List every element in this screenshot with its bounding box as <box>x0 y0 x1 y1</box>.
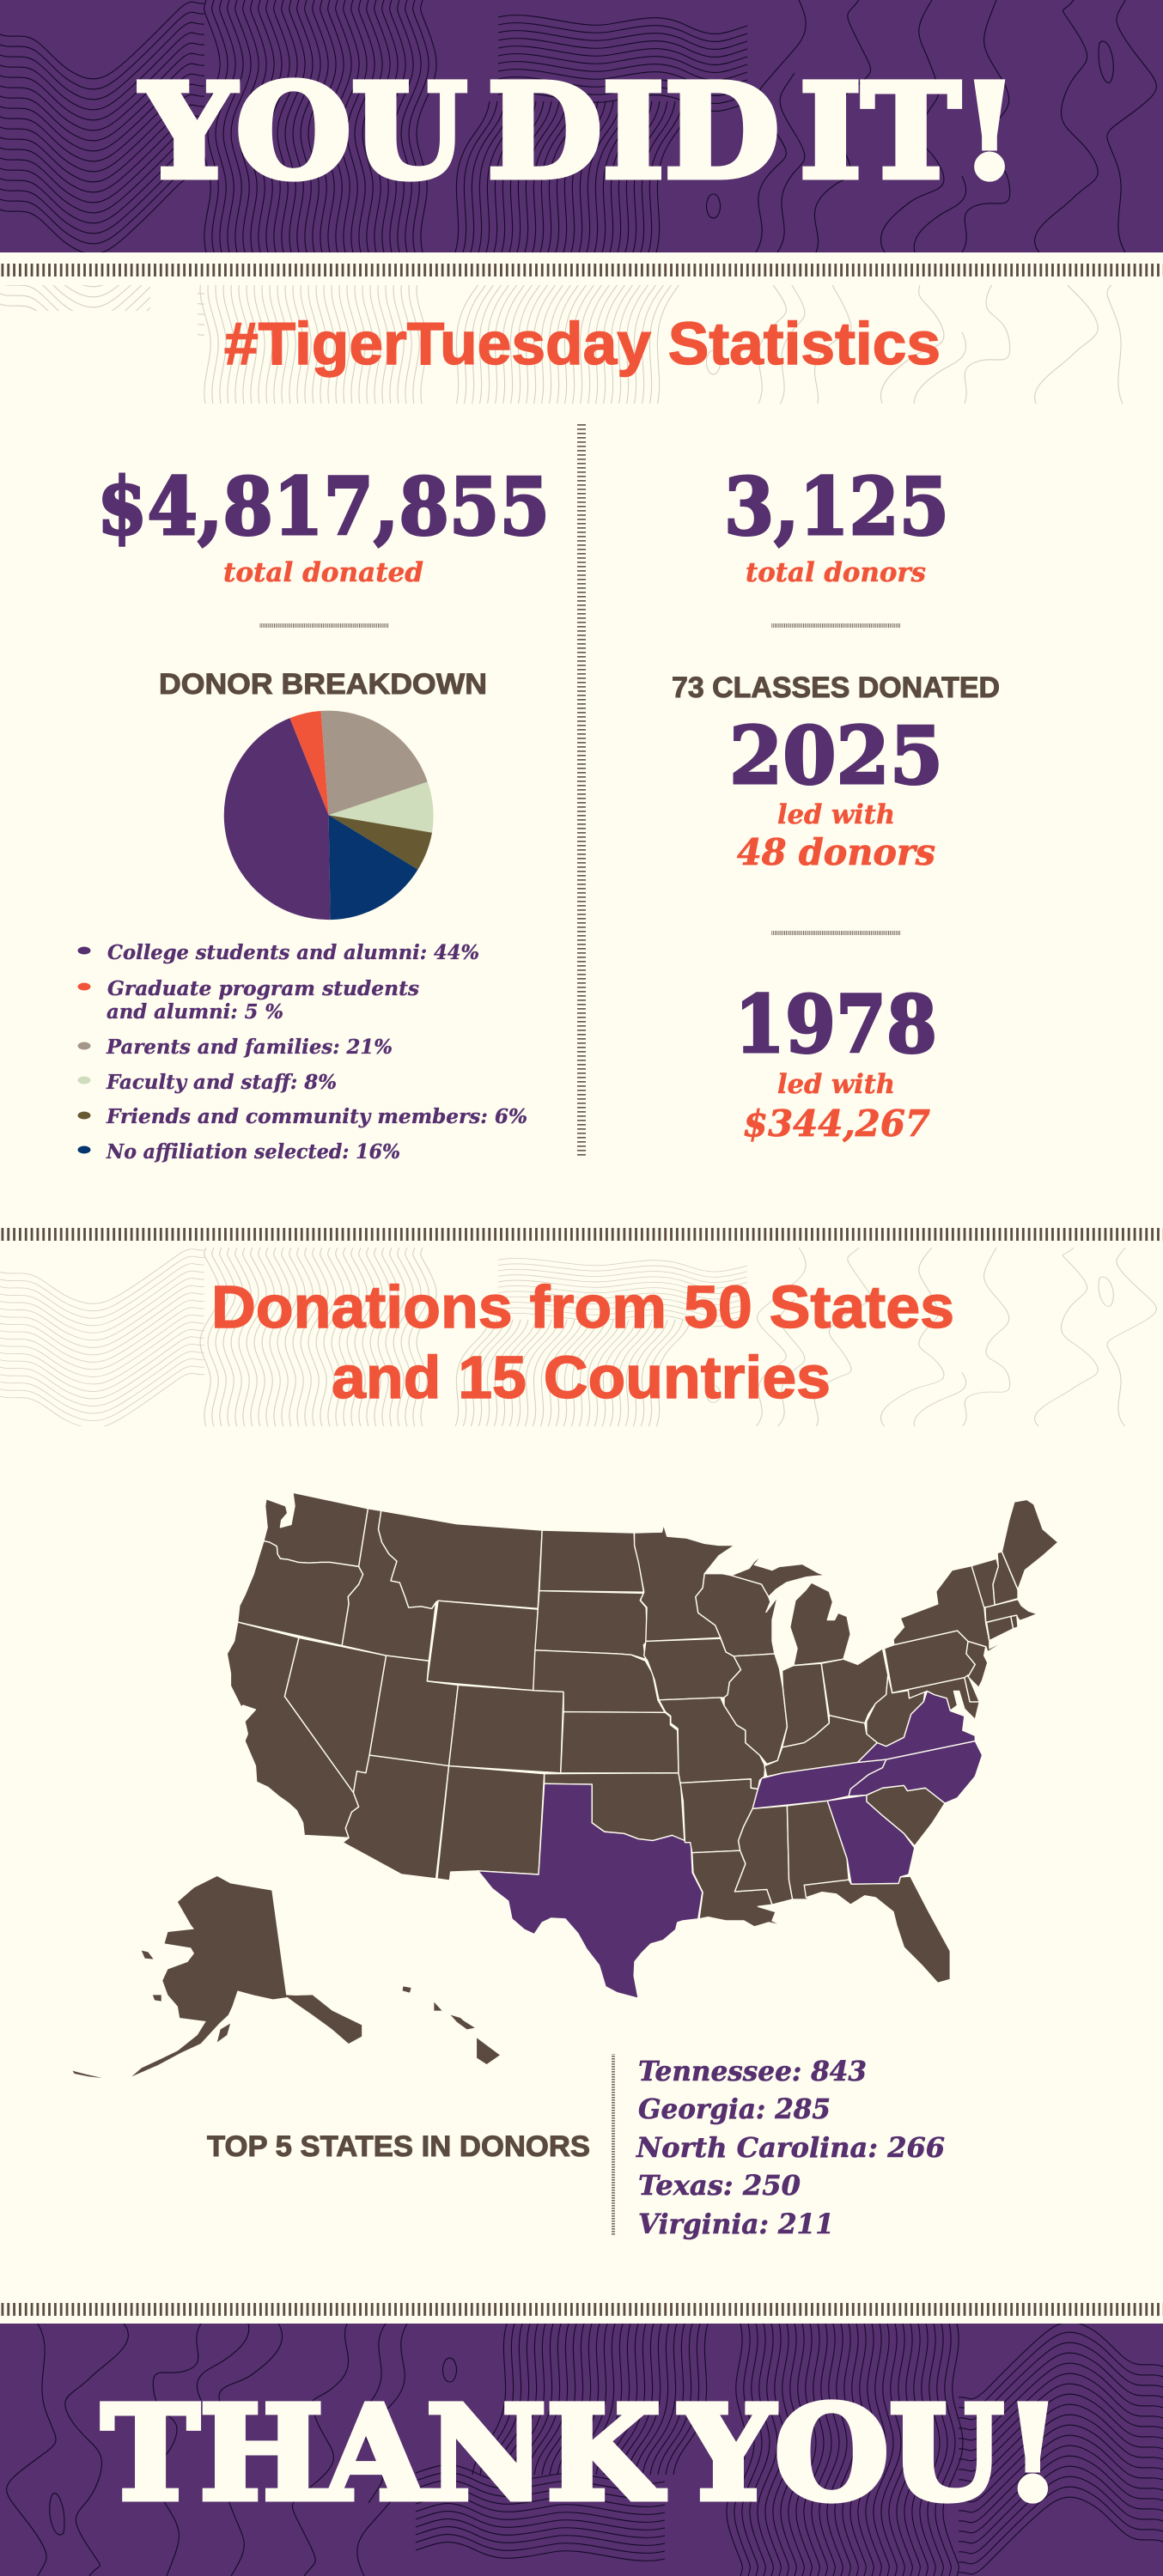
list: top 5 states in donors: Georgia: 285 <box>638 2093 831 2125</box>
stat: class of 2025: 2025 <box>729 709 943 802</box>
heading: classes donated: 73 CLASSES DONATED <box>672 671 1000 704</box>
highlighted state: Texas <box>478 1783 703 1998</box>
map: Alaska <box>72 1876 362 2078</box>
panel: total donated and donor breakdown <box>77 460 550 1163</box>
highlighted state: Tennessee <box>752 1759 886 1808</box>
map: western states <box>227 1492 703 1998</box>
stat label: led with: led with <box>777 799 895 830</box>
pie chart: donor breakdown <box>224 711 434 920</box>
title: thank you: THANK YOU! <box>101 2377 1062 2530</box>
list: top 5 states in donors: North Carolina: 266 <box>636 2131 945 2164</box>
list: top 5 states in donors: Virginia: 211 <box>638 2208 834 2240</box>
stat label: led with: led with <box>777 1069 895 1100</box>
legend: donor categories: Parents and families: 21% <box>106 1036 393 1059</box>
heading: TigerTuesday statistics: #TigerTuesday Statistics <box>224 310 941 377</box>
legend: donor categories: Faculty and staff: 8% <box>106 1071 337 1094</box>
title: you did it: YOU DID IT! <box>139 55 1019 208</box>
list: top 5 states in donors: Tennessee: 843 <box>638 2055 867 2087</box>
panel: bottom banner <box>0 2322 1163 2576</box>
list: top 5 states in donors <box>636 2055 945 2240</box>
highlighted state: Virginia <box>858 1691 975 1762</box>
list: top 5 states in donors: Texas: 250 <box>638 2169 801 2202</box>
panel: donors and classes <box>672 460 1000 1145</box>
panel: top banner <box>0 0 1163 254</box>
heading: donations from states and countries <box>211 1273 954 1411</box>
stat: total donated amount: $4,817,855 <box>97 460 550 553</box>
legend: donor categories: Graduate program students <box>107 977 419 1000</box>
legend: donor categories <box>77 941 527 1163</box>
map: Hawaii <box>403 1986 500 2064</box>
heading: donations from states and countries: Donations from 50 States <box>211 1273 954 1340</box>
stat: total donors: 3,125 <box>724 460 949 553</box>
stat label: total donors: total donors <box>746 557 926 588</box>
map: United States <box>72 1492 1058 2078</box>
stat: class of 1978: 1978 <box>734 978 937 1071</box>
stat label: total donated: total donated <box>223 557 423 588</box>
heading: donations from states and countries: and 15 Countries <box>332 1344 831 1411</box>
heading: donor breakdown: DONOR BREAKDOWN <box>159 668 487 701</box>
map: eastern states <box>635 1499 1058 1983</box>
legend: donor categories: and alumni: 5 % <box>107 1000 283 1024</box>
stat value: dollars given: $344,267 <box>743 1103 930 1145</box>
heading: top 5 states: TOP 5 STATES IN DONORS <box>207 2130 590 2163</box>
highlighted state: North Carolina <box>849 1741 983 1803</box>
legend: donor categories: College students and alumni: 44% <box>107 941 479 964</box>
stat value: 48 donors: 48 donors <box>737 831 935 873</box>
legend: donor categories: No affiliation selected: 16% <box>106 1140 400 1163</box>
legend: donor categories: Friends and community members: 6% <box>106 1105 527 1128</box>
highlighted state: Georgia <box>827 1795 915 1884</box>
